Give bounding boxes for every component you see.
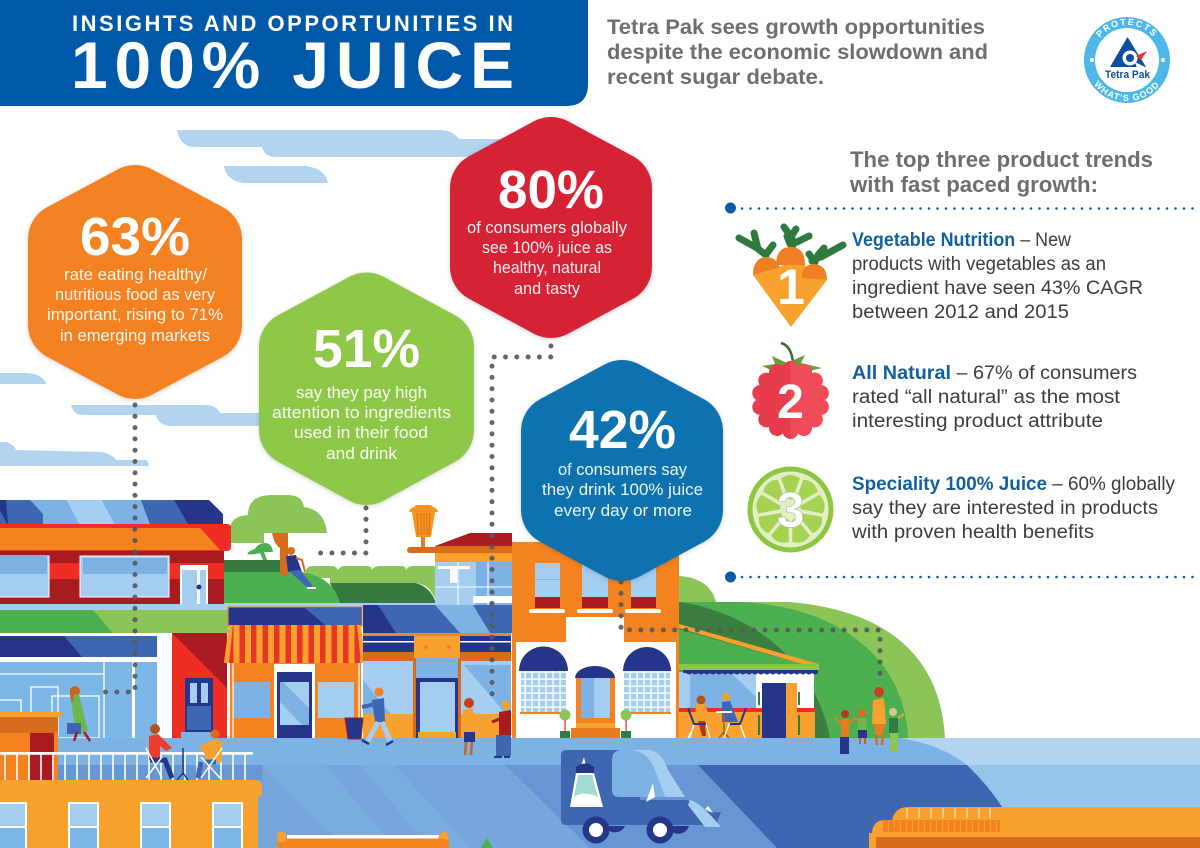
item 2 text: All Natural – 67% of consumers	[852, 363, 1137, 384]
subtitle: recent sugar debate.	[607, 66, 824, 89]
stat hexagon: 42%: they drink 100% juice	[542, 481, 703, 499]
stat hexagon: 80%: of consumers globally	[467, 219, 628, 237]
building: glass store lower left	[0, 633, 172, 738]
dotted connector: 42%	[621, 582, 880, 677]
stat hexagon: 51%: used in their food	[294, 424, 428, 442]
stat hexagon: 63%: 63%	[80, 207, 190, 267]
item 1 text: products with vegetables as an	[852, 254, 1106, 275]
stat hexagon: 63%: nutritious food as very	[55, 286, 216, 304]
building: red wall with door	[172, 633, 227, 738]
ledge and green strip	[0, 604, 228, 633]
person sitting on hill	[286, 547, 316, 589]
stat hexagon: 63%	[47, 201, 223, 363]
item 3 text	[851, 474, 1175, 543]
stat hexagon: 63%: important, rising to 71%	[47, 306, 223, 324]
building: red shop upper left	[0, 500, 231, 604]
background hills	[224, 560, 945, 738]
pavement	[0, 738, 1200, 765]
building: large orange house	[512, 542, 679, 740]
orange awning bottom right	[869, 807, 1200, 848]
small orange hut	[0, 712, 62, 780]
building: green-roof cafe	[679, 624, 819, 738]
icon: raspberry with number 2: 2	[777, 376, 804, 429]
ledge behind middle shops	[224, 603, 514, 608]
family with kids	[835, 687, 904, 754]
dotted divider bottom	[725, 572, 1200, 582]
trends heading: with fast paced growth:	[849, 172, 1098, 197]
building: upper middle window block	[435, 533, 512, 605]
stat hexagon: 63%: in emerging markets	[60, 327, 210, 345]
clouds	[0, 130, 510, 466]
stat hexagon: 63%: rate eating healthy/	[64, 266, 207, 284]
icon: lime slice with number 3	[748, 466, 834, 552]
truck	[561, 750, 721, 844]
title line 1: INSIGHTS AND OPPORTUNITIES IN	[72, 11, 513, 36]
icon: lime slice with number 3: 3	[777, 482, 804, 538]
stat hexagon: 51%: say they pay high	[296, 384, 427, 402]
terrace diners	[146, 724, 222, 780]
trends heading: The top three product trends	[850, 147, 1153, 172]
logo: Tetra Pak badge: WHAT'S GOOD	[1094, 80, 1158, 101]
stat hexagon: 80%: see 100% juice as	[482, 239, 612, 257]
building: orange awning shop	[224, 607, 365, 738]
stat hexagon: 42%	[542, 396, 703, 545]
subtitle	[607, 16, 988, 89]
cafe couple	[688, 693, 746, 738]
stat hexagon: 51%: 51%	[313, 319, 420, 379]
logo: Tetra Pak badge: PROTECTS	[1096, 18, 1156, 38]
dotted connector: 80%	[492, 346, 551, 704]
woman with shopping bag	[67, 686, 90, 741]
orange building bottom left	[0, 780, 262, 848]
trends heading	[849, 147, 1153, 197]
item 1 text: ingredient have seen 43% CAGR	[852, 278, 1143, 299]
stat hexagon: 80%: 80%	[498, 160, 604, 220]
handshake couple	[463, 698, 511, 757]
subtitle: Tetra Pak sees growth opportunities	[607, 16, 985, 39]
stat hexagon: 80%: and tasty	[514, 280, 581, 298]
dotted divider top	[725, 202, 1200, 214]
railing with lower terrace	[0, 752, 262, 782]
dotted connector: 51%	[318, 508, 366, 553]
subtitle: despite the economic slowdown and	[607, 41, 988, 64]
stat hexagon: 51%: and drink	[326, 445, 398, 463]
item 3 text: with proven health benefits	[851, 522, 1094, 543]
item 3 text: Speciality 100% Juice – 60% globally	[852, 474, 1175, 495]
icon: carrots with number 1: 1	[777, 259, 805, 315]
item 2 text	[852, 363, 1137, 432]
item 2 text: rated “all natural” as the most	[852, 387, 1121, 408]
item 2 text: interesting product attribute	[852, 411, 1103, 432]
header banner	[0, 0, 588, 106]
stat hexagon: 80%: healthy, natural	[493, 259, 601, 277]
tree on hill	[230, 495, 327, 575]
stat hexagon: 42%: every day or more	[554, 502, 692, 520]
stat hexagon: 51%: attention to ingredients	[272, 404, 451, 422]
dotted connector: 63%	[96, 405, 135, 692]
item 1 text	[852, 230, 1143, 323]
item 3 text: say they are interested in products	[852, 498, 1158, 519]
stat hexagon: 80%	[467, 153, 628, 302]
man at trash can	[345, 688, 393, 745]
stat hexagon: 51%	[272, 308, 451, 469]
stat hexagon: 42%: 42%	[569, 400, 676, 460]
icon: raspberry with number 2	[751, 343, 830, 439]
trash sign on pole	[407, 505, 438, 553]
building: blue storefront middle	[363, 605, 512, 738]
item 1 text: Vegetable Nutrition – New	[852, 230, 1071, 251]
item 1 text: between 2012 and 2015	[852, 302, 1069, 323]
road	[0, 765, 1200, 848]
logo: Tetra Pak badge	[1084, 17, 1170, 103]
logo: Tetra Pak badge: Tetra Pak	[1105, 69, 1151, 81]
orange roof bottom centre	[277, 832, 493, 848]
stat hexagon: 42%: of consumers say	[558, 461, 688, 479]
title line 2: 100% JUICE	[71, 28, 514, 102]
icon: carrots with number 1	[739, 227, 843, 327]
